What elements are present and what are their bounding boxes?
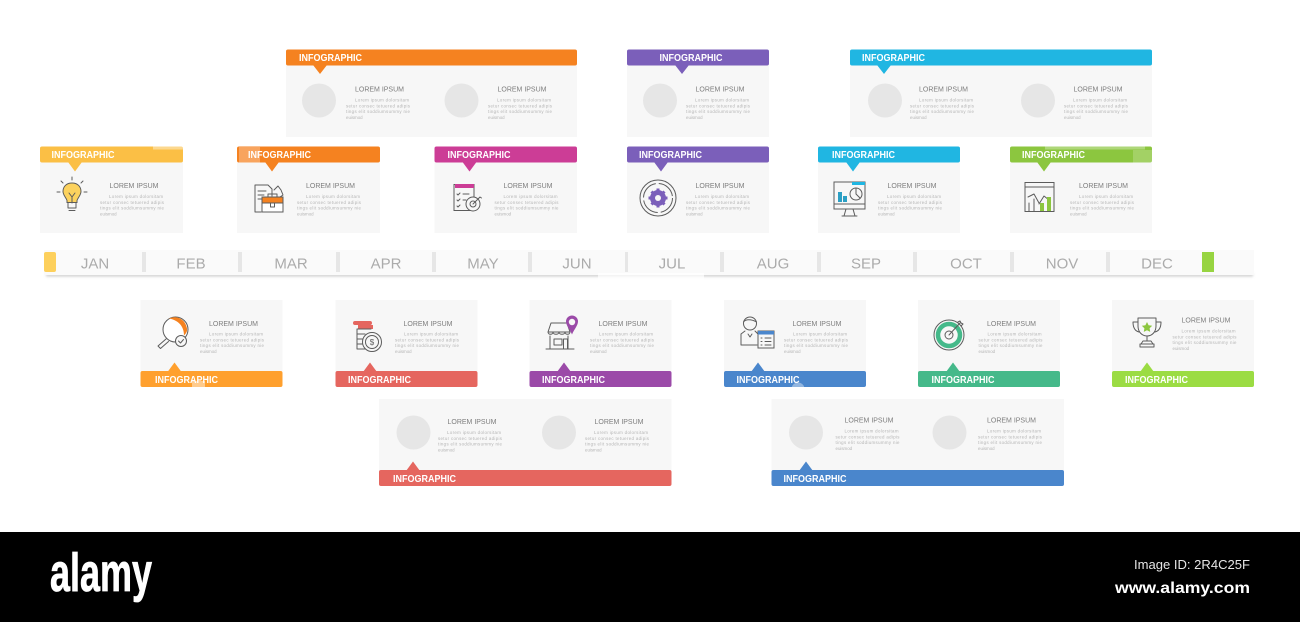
panel: blue card with monitor: INFOGRAPHIC	[832, 150, 895, 161]
panel: top blue wide card: INFOGRAPHIC	[862, 53, 925, 64]
panel: teal card with target: tings elit soddiumsummy nie	[978, 343, 1043, 348]
icon: briefcase with document	[255, 185, 283, 212]
panel: blue card with person and list: LOREM IPSUM	[792, 321, 842, 328]
panel: bottom coral wide card: LOREM IPSUM	[447, 419, 497, 426]
panel: lime card with trophy: tings elit soddiumsummy nie	[1172, 340, 1237, 345]
panel: bottom blue wide card: setur consec tetuered adipis	[836, 434, 900, 440]
timeline: months bar: JUL	[659, 256, 685, 272]
panel: orange card with briefcase	[237, 146, 380, 233]
panel: magenta card with checklist target: LOREM IPSUM	[503, 183, 553, 190]
panel: top blue wide card: euismod	[1064, 115, 1081, 120]
panel: orange card with briefcase: setur consec tetuered adipis	[297, 200, 362, 205]
icon: target with arrow	[934, 320, 964, 350]
panel: coral card with coins: LOREM IPSUM	[403, 321, 453, 328]
panel: top blue wide card: setur consec tetuered adipis	[1064, 104, 1129, 108]
panel: bottom blue wide card: tings elit soddiumsummy nie	[836, 440, 900, 445]
timeline: months bar: AUG	[757, 256, 789, 272]
footer: stock image banner: alamy	[50, 543, 152, 603]
panel: lime card with trophy	[1112, 300, 1254, 387]
panel: purple card with gear: setur consec tetuered adipis	[686, 200, 751, 205]
panel: yellow card with light bulb: Lorem ipsum dolorsitam	[109, 194, 163, 199]
footer: stock image banner: www.alamy.com	[1114, 580, 1250, 597]
panel: amber card with magnifier: Lorem ipsum dolorsitam	[209, 332, 263, 336]
panel: coral card with coins: setur consec tetuered adipis	[395, 338, 460, 342]
panel: top purple card: euismod	[686, 115, 703, 120]
panel: violet card with shop and pin: euismod	[590, 349, 607, 354]
timeline: months bar: MAR	[274, 256, 308, 272]
panel: blue card with monitor: LOREM IPSUM	[887, 183, 937, 190]
panel: teal card with target	[918, 300, 1060, 387]
panel: purple card with gear: Lorem ipsum dolorsitam	[695, 194, 749, 199]
panel: top purple card: LOREM IPSUM	[695, 86, 745, 94]
panel: blue card with monitor: tings elit soddiumsummy nie	[878, 206, 943, 210]
panel: top blue wide card: tings elit soddiumsummy nie	[1064, 109, 1129, 114]
panel: blue card with person and list: Lorem ipsum dolorsitam	[793, 332, 847, 336]
timeline: months bar	[44, 250, 1254, 280]
icon: person with checklist	[741, 317, 774, 348]
icon: gear in cycle arrows	[640, 180, 676, 216]
panel: teal card with target: INFOGRAPHIC	[932, 375, 994, 386]
timeline: months bar: NOV	[1046, 256, 1078, 272]
icon: magnifier with check	[158, 317, 188, 348]
panel: top orange wide card: LOREM IPSUM	[355, 86, 404, 94]
panel: bottom blue wide card: Lorem ipsum dolorsitam	[987, 428, 1041, 434]
panel: magenta card with checklist target	[434, 146, 577, 233]
panel: coral card with coins: INFOGRAPHIC	[348, 375, 411, 386]
panel: amber card with magnifier: setur consec tetuered adipis	[200, 338, 265, 342]
panel: bottom coral wide card: setur consec tetuered adipis	[438, 436, 503, 441]
icon: coins with dollar	[353, 321, 382, 352]
icon: browser window with bar chart	[1025, 182, 1054, 212]
panel: green card with browser chart: Lorem ipsum dolorsitam	[1079, 194, 1133, 199]
panel: top blue wide card: setur consec tetuered adipis	[910, 104, 975, 108]
panel: lime card with trophy: INFOGRAPHIC	[1125, 375, 1188, 386]
panel: top purple card: INFOGRAPHIC	[660, 53, 722, 64]
panel: blue card with monitor: setur consec tetuered adipis	[878, 200, 943, 205]
panel: orange card with briefcase: INFOGRAPHIC	[248, 150, 311, 161]
panel: teal card with target: euismod	[978, 349, 996, 354]
panel: yellow card with light bulb: LOREM IPSUM	[109, 183, 159, 190]
timeline: months bar: DEC	[1141, 256, 1173, 272]
panel: purple card with gear: LOREM IPSUM	[695, 183, 745, 190]
panel: magenta card with checklist target: Lorem ipsum dolorsitam	[504, 194, 558, 199]
panel: violet card with shop and pin: tings elit soddiumsummy nie	[590, 343, 655, 348]
panel: coral card with coins: tings elit soddiumsummy nie	[395, 343, 460, 348]
panel: bottom coral wide card: Lorem ipsum dolorsitam	[447, 430, 501, 435]
panel: top orange wide card: LOREM IPSUM	[497, 86, 547, 94]
panel: yellow card with light bulb: INFOGRAPHIC	[52, 150, 114, 161]
panel: green card with browser chart	[1010, 146, 1152, 233]
panel: top orange wide card	[286, 50, 577, 137]
icon: light bulb	[57, 177, 87, 210]
panel: top orange wide card: tings elit soddiumsummy nie	[488, 109, 553, 114]
panel: blue card with monitor	[818, 146, 960, 233]
panel: bottom coral wide card: tings elit soddiumsummy nie	[585, 442, 650, 446]
panel: top blue wide card: LOREM IPSUM	[919, 86, 968, 94]
panel: lime card with trophy: LOREM IPSUM	[1181, 318, 1231, 324]
panel: bottom coral wide card: LOREM IPSUM	[594, 419, 644, 426]
panel: top blue wide card: tings elit soddiumsummy nie	[910, 109, 975, 114]
panel: orange card with briefcase: Lorem ipsum dolorsitam	[306, 194, 360, 199]
panel: bottom coral wide card: Lorem ipsum dolorsitam	[594, 430, 648, 435]
panel: top orange wide card: INFOGRAPHIC	[299, 53, 362, 64]
panel: bottom coral wide card: setur consec tetuered adipis	[585, 436, 650, 441]
panel: teal card with target: LOREM IPSUM	[987, 321, 1036, 328]
panel: green card with browser chart: tings elit soddiumsummy nie	[1070, 206, 1135, 210]
panel: bottom blue wide card: Lorem ipsum dolorsitam	[844, 428, 899, 434]
panel: magenta card with checklist target: setur consec tetuered adipis	[494, 200, 559, 205]
icon: monitor with charts	[834, 182, 865, 216]
panel: coral card with coins	[336, 300, 478, 387]
panel: bottom blue wide card: LOREM IPSUM	[987, 418, 1036, 424]
icon: checklist with target	[454, 184, 482, 211]
panel: bottom coral wide card	[379, 399, 672, 486]
panel: coral card with coins: euismod	[395, 349, 412, 354]
panel: blue card with person and list: tings elit soddiumsummy nie	[784, 343, 849, 348]
panel: lime card with trophy: Lorem ipsum dolorsitam	[1182, 328, 1236, 334]
panel: bottom coral wide card: tings elit soddiumsummy nie	[438, 442, 503, 446]
panel: amber card with magnifier: tings elit soddiumsummy nie	[200, 343, 265, 348]
panel: blue card with person and list: setur consec tetuered adipis	[784, 338, 849, 342]
panel: violet card with shop and pin	[530, 300, 672, 387]
panel: lime card with trophy: setur consec tetuered adipis	[1172, 334, 1237, 340]
icon: coins with dollar: $	[370, 338, 375, 347]
panel: top orange wide card: setur consec tetuered adipis	[488, 104, 553, 108]
panel: purple card with gear	[627, 146, 769, 233]
panel: top purple card	[627, 50, 769, 137]
panel: bottom blue wide card: LOREM IPSUM	[844, 418, 894, 424]
panel: top orange wide card: euismod	[488, 115, 505, 120]
panel: top blue wide card	[850, 50, 1152, 137]
panel: amber card with magnifier: INFOGRAPHIC	[155, 375, 218, 386]
panel: violet card with shop and pin: Lorem ipsum dolorsitam	[599, 332, 653, 336]
panel: purple card with gear: INFOGRAPHIC	[639, 150, 702, 161]
icon: shop with location pin	[546, 316, 578, 349]
panel: top orange wide card: Lorem ipsum dolorsitam	[497, 98, 551, 102]
timeline: months bar: SEP	[851, 256, 881, 272]
panel: green card with browser chart: INFOGRAPHIC	[1022, 150, 1085, 161]
panel: top blue wide card: Lorem ipsum dolorsitam	[1073, 98, 1127, 102]
panel: top purple card: setur consec tetuered adipis	[686, 104, 751, 108]
panel: top blue wide card: LOREM IPSUM	[1073, 86, 1123, 94]
panel: green card with browser chart: setur consec tetuered adipis	[1070, 200, 1135, 205]
panel: purple card with gear: tings elit soddiumsummy nie	[686, 206, 751, 210]
panel: top orange wide card: Lorem ipsum dolorsitam	[355, 98, 409, 102]
panel: amber card with magnifier	[140, 300, 282, 387]
panel: blue card with monitor: Lorem ipsum dolorsitam	[887, 194, 941, 199]
timeline: months bar: OCT	[950, 256, 982, 272]
panel: bottom blue wide card: euismod	[836, 446, 853, 451]
panel: yellow card with light bulb: tings elit soddiumsummy nie	[100, 206, 165, 210]
icon: trophy with star	[1133, 318, 1161, 347]
panel: orange card with briefcase: euismod	[297, 212, 314, 216]
panel: top orange wide card: euismod	[346, 115, 363, 120]
panel: magenta card with checklist target: INFOGRAPHIC	[448, 150, 510, 161]
panel: orange card with briefcase: tings elit soddiumsummy nie	[297, 206, 362, 210]
panel: purple card with gear: euismod	[686, 212, 703, 216]
panel: blue card with person and list: euismod	[784, 349, 801, 354]
panel: orange card with briefcase: LOREM IPSUM	[306, 183, 355, 190]
panel: yellow card with light bulb	[40, 146, 183, 233]
panel: yellow card with light bulb: setur consec tetuered adipis	[100, 200, 165, 205]
panel: top orange wide card: setur consec tetuered adipis	[346, 104, 411, 108]
panel: violet card with shop and pin: setur consec tetuered adipis	[590, 338, 655, 342]
panel: top blue wide card: Lorem ipsum dolorsitam	[919, 98, 973, 102]
panel: blue card with monitor: euismod	[878, 212, 895, 216]
panel: yellow card with light bulb: euismod	[100, 212, 117, 216]
panel: bottom blue wide card: setur consec tetuered adipis	[978, 434, 1043, 440]
panel: bottom blue wide card: INFOGRAPHIC	[784, 474, 846, 485]
panel: top purple card: tings elit soddiumsummy nie	[686, 109, 751, 114]
panel: magenta card with checklist target: euismod	[494, 212, 512, 216]
panel: amber card with magnifier: LOREM IPSUM	[209, 321, 258, 328]
panel: top blue wide card: euismod	[910, 115, 927, 120]
timeline: months bar: MAY	[467, 256, 499, 272]
panel: blue card with person and list	[724, 300, 866, 396]
panel: teal card with target: setur consec tetuered adipis	[978, 338, 1043, 342]
panel: amber card with magnifier: euismod	[200, 349, 217, 354]
panel: bottom blue wide card: tings elit soddiumsummy nie	[978, 440, 1043, 445]
panel: lime card with trophy: euismod	[1172, 346, 1190, 351]
panel: top purple card: Lorem ipsum dolorsitam	[695, 98, 749, 102]
panel: top orange wide card: tings elit soddiumsummy nie	[346, 109, 411, 114]
timeline: months bar: APR	[371, 256, 402, 272]
panel: teal card with target: Lorem ipsum dolorsitam	[988, 332, 1042, 336]
panel: magenta card with checklist target: tings elit soddiumsummy nie	[494, 206, 559, 210]
panel: blue card with person and list: INFOGRAPHIC	[736, 375, 800, 386]
timeline: months bar: FEB	[176, 256, 206, 272]
panel: green card with browser chart: euismod	[1070, 212, 1087, 216]
panel: bottom coral wide card: INFOGRAPHIC	[393, 474, 456, 485]
panel: bottom coral wide card: euismod	[585, 448, 602, 452]
footer: stock image banner	[0, 532, 1300, 622]
panel: bottom coral wide card: euismod	[438, 448, 455, 452]
panel: bottom blue wide card: euismod	[978, 446, 995, 451]
timeline: months bar: JAN	[81, 256, 109, 272]
panel: green card with browser chart: LOREM IPSUM	[1079, 183, 1128, 190]
timeline: months bar: JUN	[562, 256, 592, 272]
panel: violet card with shop and pin: INFOGRAPHIC	[542, 375, 605, 386]
footer: stock image banner: Image ID: 2R4C25F	[1134, 557, 1250, 572]
panel: bottom blue wide card	[772, 399, 1064, 486]
panel: violet card with shop and pin: LOREM IPSUM	[598, 321, 648, 328]
panel: coral card with coins: Lorem ipsum dolorsitam	[404, 332, 458, 336]
